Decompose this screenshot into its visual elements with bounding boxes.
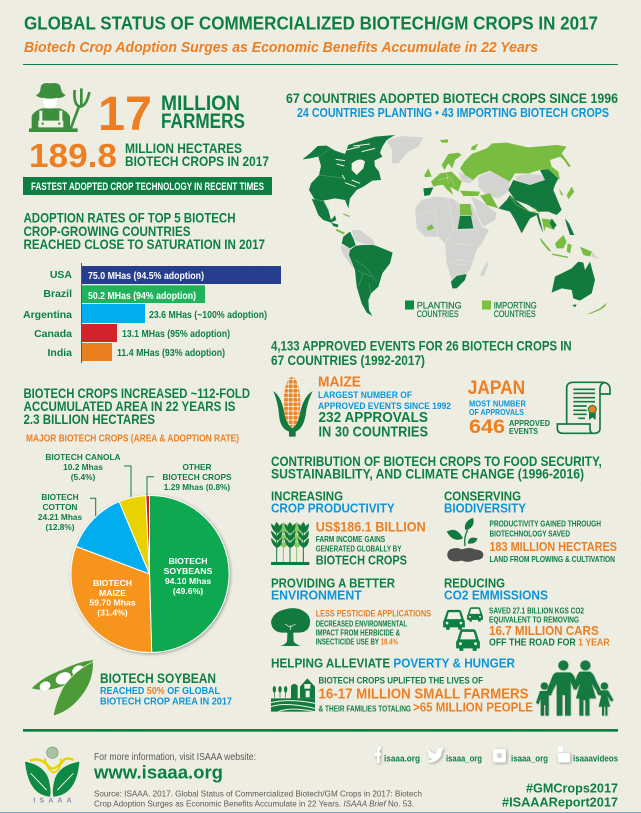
block: crop productivity: FARM INCOME GAINS bbox=[316, 534, 385, 544]
banner: fastest adopted: FASTEST ADOPTED CROP TECHNOLOGY IN RECENT TIMES bbox=[31, 181, 264, 193]
block: environment: LESS PESTICIDE APPLICATIONS bbox=[316, 609, 431, 620]
heading: adoption rates: CROP-GROWING COUNTRIES bbox=[24, 224, 190, 239]
text: japan: OF APPROVALS bbox=[469, 407, 524, 417]
stat: 17 million farmers: MILLION bbox=[161, 92, 240, 115]
bar: Argentina: 23.6 MHas (~100% adoption) bbox=[149, 310, 267, 321]
text: japan bbox=[468, 378, 550, 438]
social: youtube: isaaavideos bbox=[573, 754, 618, 764]
block: co2: 16.7 MILLION CARS bbox=[489, 624, 599, 638]
stat: 17 million farmers bbox=[98, 88, 245, 141]
icon: seedling bbox=[447, 518, 483, 562]
text: maize bbox=[318, 374, 451, 441]
label: maize: MAIZE bbox=[99, 588, 126, 598]
panel: farmers and hectares bbox=[23, 83, 272, 195]
block: biodiversity: BIOTECHNOLOGY SAVED bbox=[490, 529, 570, 539]
banner: fastest adopted bbox=[23, 177, 272, 195]
text: website: www.isaaa.org bbox=[93, 761, 223, 782]
social: youtube bbox=[558, 746, 618, 764]
block: crop productivity: GENERATED GLOBALLY BY bbox=[316, 544, 402, 554]
bar: Canada bbox=[34, 324, 230, 342]
text: japan: JAPAN bbox=[468, 378, 525, 399]
block: co2: EQUIVALENT TO REMOVING bbox=[489, 615, 579, 625]
map: eurasia africa oceania bbox=[415, 139, 607, 314]
text: japan: MOST NUMBER bbox=[469, 399, 526, 409]
block: co2: OFF THE ROAD FOR 1 YEAR bbox=[489, 637, 610, 649]
legend: importing countries: COUNTRIES bbox=[494, 309, 536, 319]
block: crop productivity: BIOTECH CROPS bbox=[316, 553, 407, 568]
social: instagram bbox=[493, 749, 548, 764]
icon: farmer bbox=[29, 83, 89, 132]
icon: tree bbox=[271, 608, 310, 646]
label: soybeans: BIOTECH bbox=[168, 556, 208, 566]
block: crop productivity: INCREASING bbox=[271, 489, 343, 504]
heading: adoption rates bbox=[24, 211, 265, 252]
legend: importing countries bbox=[482, 300, 537, 319]
heading: 4,133 approved events: 67 COUNTRIES (1992-2017) bbox=[271, 353, 425, 368]
label: soybeans: 94.10 Mhas bbox=[165, 576, 211, 586]
block: poverty and hunger: >65 MILLION PEOPLE bbox=[413, 700, 533, 715]
icon: farm bbox=[271, 678, 315, 712]
social: twitter: isaaa_org bbox=[446, 754, 482, 764]
bar: USA: 75.0 MHas (94.5% adoption) bbox=[88, 271, 204, 282]
icon: certificate scroll bbox=[557, 382, 610, 433]
legend: planting countries: COUNTRIES bbox=[417, 309, 459, 319]
block: co2 bbox=[443, 575, 610, 651]
stat: 189.8 million hectares: BIOTECH CROPS IN 2017 bbox=[125, 153, 269, 169]
text: source bbox=[94, 789, 422, 809]
icon: soybean pods bbox=[32, 660, 93, 716]
social: facebook bbox=[374, 746, 420, 764]
stat: 189.8 million hectares: MILLION HECTARES bbox=[125, 140, 242, 156]
block: biodiversity: PRODUCTIVITY GAINED THROUGH bbox=[490, 519, 601, 529]
heading: 112-fold: BIOTECH CROPS INCREASED ~112-FOLD bbox=[24, 386, 250, 401]
label: cotton: COTTON bbox=[43, 502, 77, 512]
text: website: For more information, visit ISAAA website: bbox=[94, 751, 256, 763]
text: japan: EVENTS bbox=[509, 427, 539, 436]
heading: contribution bbox=[271, 454, 602, 482]
label: soybeans: (49.6%) bbox=[173, 586, 203, 596]
callout: biotech soybean: REACHED 50% OF GLOBAL bbox=[100, 686, 220, 697]
heading: adoption rates: REACHED CLOSE TO SATURATION IN 2017 bbox=[24, 237, 265, 252]
hashtags bbox=[502, 781, 618, 810]
block: biodiversity: 183 MILLION HECTARES bbox=[490, 540, 617, 554]
panel: approved events bbox=[271, 339, 610, 441]
heading: 112-fold: 2.3 BILLION HECTARES bbox=[24, 412, 155, 427]
heading: 4,133 approved events: 4,133 APPROVED EVENTS FOR 26 BIOTECH CROPS IN bbox=[271, 339, 572, 354]
text: japan: 646 bbox=[469, 417, 505, 438]
label: maize bbox=[89, 578, 136, 618]
legend: planting countries bbox=[405, 300, 462, 319]
bar: Argentina: Argentina bbox=[23, 309, 72, 321]
label: other: 1.29 Mhas (0.8%) bbox=[164, 482, 230, 492]
block: co2: SAVED 27.1 BILLION KGS CO2 bbox=[489, 605, 584, 615]
title: GLOBAL STATUS OF COMMERCIALIZED BIOTECH/GM CROPS IN 2017 bbox=[24, 12, 598, 34]
bar: India: India bbox=[47, 347, 72, 359]
label: other: BIOTECH CROPS bbox=[162, 472, 232, 482]
social: facebook: isaaa.org bbox=[384, 754, 420, 764]
logo: ISAAA bbox=[25, 747, 79, 805]
label: soybeans bbox=[164, 556, 213, 596]
label: canola: 10.2 Mhas bbox=[63, 462, 103, 472]
panel: contribution bbox=[271, 454, 617, 716]
social: instagram: isaaa_org bbox=[511, 754, 548, 764]
heading: 67 countries bbox=[286, 90, 618, 120]
label: cotton: BIOTECH bbox=[41, 492, 79, 502]
block: crop productivity bbox=[271, 489, 426, 568]
label: canola: BIOTECH CANOLA bbox=[45, 452, 121, 462]
map: world bbox=[302, 135, 607, 316]
block: crop productivity: US$186.1 BILLION bbox=[316, 520, 426, 535]
stat: 17 million farmers: 17 bbox=[98, 88, 152, 141]
heading: adoption rates: ADOPTION RATES OF TOP 5 BIOTECH bbox=[24, 211, 236, 226]
label: cotton: (12.8%) bbox=[45, 522, 75, 532]
text: maize: 232 APPROVALS bbox=[318, 409, 428, 426]
block: co2: CO2 EMMISSIONS bbox=[444, 587, 548, 602]
legend: importing countries: IMPORTING bbox=[494, 300, 537, 310]
panel: footer bbox=[25, 746, 618, 810]
bar: Canada: 13.1 MHas (95% adoption) bbox=[122, 329, 230, 340]
icon: family bbox=[536, 660, 613, 716]
label: canola bbox=[45, 452, 121, 482]
map: americas bbox=[302, 135, 423, 316]
block: crop productivity: CROP PRODUCTIVITY bbox=[271, 501, 395, 516]
bar: India bbox=[47, 343, 225, 361]
heading: 112-fold: ACCUMULATED AREA IN 22 YEARS IS bbox=[24, 399, 236, 414]
block: poverty and hunger: BIOTECH CROPS UPLIFTED THE LIVES OF bbox=[318, 675, 483, 686]
block: poverty and hunger bbox=[271, 656, 613, 716]
label: soybeans: SOYBEANS bbox=[164, 566, 213, 576]
subheading: major crops: MAJOR BIOTECH CROPS (AREA & ADOPTION RATE) bbox=[26, 434, 239, 444]
subtitle: Biotech Crop Adoption Surges as Economic Benefits Accumulate in 22 Years bbox=[24, 39, 538, 56]
legend: planting countries: PLANTING bbox=[417, 300, 462, 310]
stat: 17 million farmers: FARMERS bbox=[161, 110, 245, 133]
icon: cars bbox=[443, 607, 483, 651]
block: environment bbox=[271, 575, 431, 646]
label: other: OTHER bbox=[182, 462, 212, 472]
hashtags: #GMCrops2017 bbox=[526, 781, 618, 796]
heading: 112-fold bbox=[24, 386, 250, 427]
text: source: Source: ISAAA. 2017. Global Status of Commercialized Biotech/GM Crops in 2017: Biotech bbox=[94, 789, 422, 799]
block: poverty and hunger: HELPING ALLEVIATE POVERTY & HUNGER bbox=[271, 656, 516, 671]
panel: adoption rates bbox=[23, 211, 281, 363]
pie chart: crops bbox=[38, 452, 232, 653]
panel: accumulated area bbox=[24, 386, 250, 716]
block: environment: INSECTICIDE USE BY 18.4% bbox=[316, 636, 398, 646]
bar: Brazil: Brazil bbox=[43, 288, 72, 300]
text: maize: MAIZE bbox=[318, 374, 361, 391]
bar: Canada: Canada bbox=[34, 328, 72, 340]
text: website bbox=[93, 751, 256, 782]
bar: USA: USA bbox=[50, 269, 72, 281]
heading: contribution: SUSTAINABILITY, AND CLIMATE CHANGE (1996-2016) bbox=[271, 466, 584, 482]
hashtags: #ISAAAReport2017 bbox=[502, 795, 618, 810]
stat: 189.8 million hectares: 189.8 bbox=[29, 137, 117, 174]
label: cotton: 24.21 Mhas bbox=[38, 512, 83, 522]
block: poverty and hunger: & THEIR FAMILIES TOTALING bbox=[318, 705, 411, 714]
block: environment: PROVIDING A BETTER bbox=[271, 575, 396, 590]
block: biodiversity bbox=[444, 489, 617, 564]
text: source: Crop Adoption Surges as Economic Benefits Accumulate in 22 Years. ISAAA Brief No. 53. bbox=[94, 799, 414, 809]
bar chart: top 5 countries bbox=[23, 263, 281, 363]
label: cotton bbox=[38, 492, 83, 532]
social: twitter bbox=[427, 747, 482, 764]
stat: 189.8 million hectares bbox=[29, 137, 269, 174]
text: maize: IN 30 COUNTRIES bbox=[318, 424, 428, 441]
text: maize: LARGEST NUMBER OF bbox=[318, 390, 412, 401]
block: environment: IMPACT FROM HERBICIDE & bbox=[316, 628, 400, 638]
block: co2: REDUCING bbox=[444, 575, 505, 590]
label: canola: (5.4%) bbox=[71, 472, 95, 482]
text: maize: APPROVED EVENTS SINCE 1992 bbox=[318, 401, 451, 412]
block: environment: ENVIRONMENT bbox=[271, 587, 362, 602]
heading: 4,133 approved events bbox=[271, 339, 572, 368]
bar: USA bbox=[50, 266, 281, 284]
callout: biotech soybean: BIOTECH CROP AREA IN 2017 bbox=[100, 696, 232, 708]
block: biodiversity: BIODIVERSITY bbox=[444, 501, 526, 516]
label: maize: BIOTECH bbox=[93, 578, 132, 588]
block: biodiversity: CONSERVING bbox=[444, 489, 521, 504]
label: other bbox=[162, 462, 232, 492]
text: japan: APPROVED bbox=[509, 419, 550, 428]
logo: ISAAA: ISAAA bbox=[33, 798, 72, 805]
bar: Argentina bbox=[23, 304, 267, 323]
bar: India: 11.4 MHas (93% adoption) bbox=[117, 348, 225, 359]
icon: wheat bbox=[271, 522, 309, 565]
block: poverty and hunger: 16-17 MILLION SMALL FARMERS bbox=[318, 685, 528, 702]
block: environment: DECREASED ENVIRONMENTAL bbox=[316, 619, 407, 629]
label: maize: (31.4%) bbox=[97, 608, 128, 618]
bar: Brazil bbox=[43, 285, 205, 303]
callout: biotech soybean: BIOTECH SOYBEAN bbox=[100, 670, 216, 686]
label: maize: 59.70 Mhas bbox=[89, 598, 136, 608]
bar: Brazil: 50.2 MHas (94% adoption) bbox=[88, 291, 196, 302]
callout: biotech soybean bbox=[100, 670, 232, 708]
panel: world map bbox=[286, 90, 618, 319]
icon: maize cob bbox=[273, 377, 313, 437]
